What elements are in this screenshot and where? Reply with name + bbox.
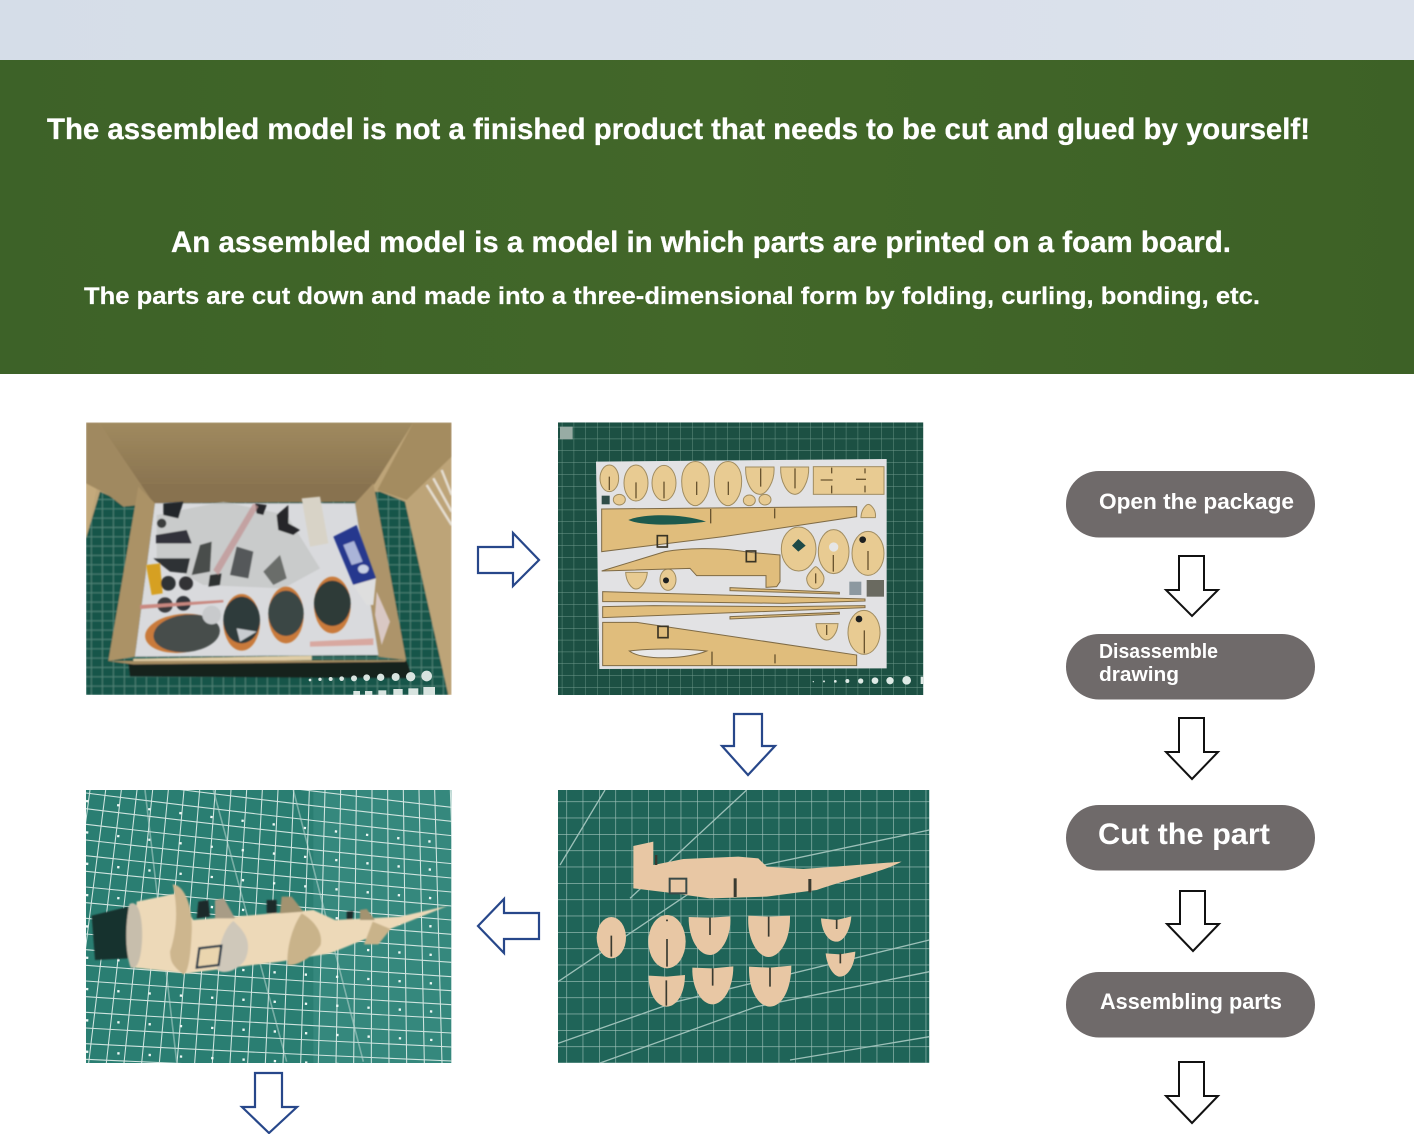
fuselage side strips <box>602 507 865 666</box>
flow arrow 3 <box>1167 891 1219 951</box>
top band <box>0 0 1414 60</box>
flow arrow 1 <box>1166 556 1218 616</box>
arrow: drawing to cut part <box>722 714 775 775</box>
flow step: disassemble drawing <box>1066 634 1315 700</box>
flow step: disassemble drawing: drawing <box>1099 663 1179 686</box>
ruler marks on mat <box>309 671 435 695</box>
bulkhead parts <box>597 915 855 1007</box>
glue tube <box>333 525 390 645</box>
photo: opened package in box <box>86 422 452 695</box>
text: how the parts are made: The parts are cut down and made into a three-dimensional form by folding, curling, bonding, etc. <box>84 283 1260 310</box>
bulkhead shapes <box>600 461 884 654</box>
photo: parts sheet on cutting mat <box>558 422 923 695</box>
header panel <box>0 60 1414 374</box>
flow step: cut the part <box>1066 805 1315 870</box>
flow step: assembling parts <box>1066 972 1315 1038</box>
text: definition of an assembled model: An assembled model is a model in which parts are printed on a foam board. <box>171 226 1231 259</box>
flow step: open the package <box>1066 471 1315 538</box>
flow arrow 2 <box>1166 718 1218 779</box>
flow step: assembling parts: Assembling parts <box>1100 989 1282 1014</box>
arrow: assembled to next step <box>242 1073 297 1133</box>
bag of small parts <box>140 497 328 613</box>
flow arrow 4 <box>1166 1062 1218 1123</box>
heading: not a finished product: The assembled model is not a finished product that needs to be cut and glued by yourself! <box>47 113 1310 146</box>
photo: parts cut out on mat <box>558 790 929 1063</box>
foam parts with round windows <box>143 577 373 656</box>
photo: assembled fuselage on mat <box>86 790 452 1063</box>
ruler dots <box>813 676 923 685</box>
flow step: cut the part: Cut the part <box>1098 818 1270 851</box>
fuselage part <box>633 842 902 898</box>
dark slots and openings <box>602 468 884 665</box>
arrow: open to drawing <box>478 533 539 586</box>
flow step: disassemble drawing: Disassemble <box>1099 640 1218 663</box>
arrow: cut part to assembled <box>478 899 539 953</box>
flow step: open the package: Open the package <box>1099 489 1294 514</box>
assembled model <box>92 884 448 974</box>
